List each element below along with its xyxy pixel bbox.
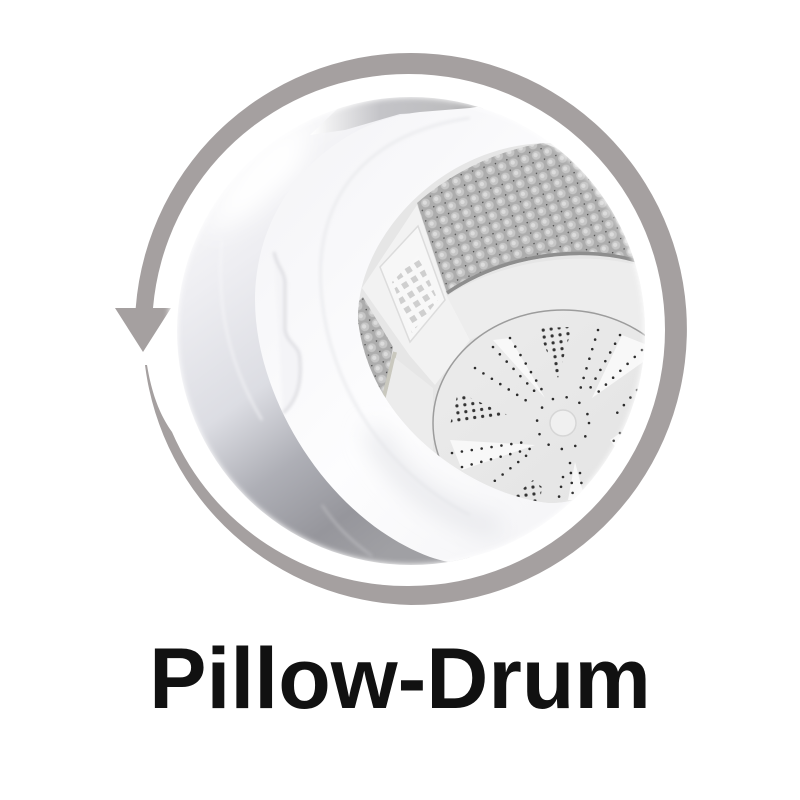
pillow-drum badge (115, 53, 687, 709)
basket lip (447, 253, 640, 293)
floor left (388, 358, 396, 388)
basket divider (383, 352, 395, 400)
lint filter (380, 226, 445, 342)
hole cluster top (541, 327, 570, 378)
tub floor band (447, 259, 660, 340)
rim lower shade (372, 430, 500, 530)
drum opening (358, 143, 645, 503)
hole cluster bottom (516, 480, 542, 502)
washer drum photo (177, 97, 645, 565)
outer tub (170, 95, 470, 570)
arrow head (115, 308, 171, 352)
upper basket wall (417, 143, 640, 293)
opening base (359, 143, 644, 454)
tub crease (239, 372, 262, 420)
rim grip (274, 252, 300, 413)
white rim (255, 107, 566, 562)
arrow ring (136, 53, 687, 605)
top shadow strip (330, 97, 482, 132)
lint filter grille (392, 255, 438, 333)
rotation arrow (115, 53, 687, 605)
rim contour (320, 118, 467, 427)
pulsator fins (450, 335, 660, 500)
lower crease (322, 505, 372, 556)
pulsator plate (432, 309, 645, 456)
photo vignette (173, 93, 649, 569)
pulsator holes (452, 330, 642, 502)
label: Pillow-Drum: Pillow-Drum (149, 631, 651, 727)
lower-left basket wall (358, 297, 393, 396)
hole cluster left (450, 396, 507, 423)
filter housing (362, 205, 470, 385)
pulsator hub (550, 410, 576, 436)
tub highlight (228, 148, 294, 216)
